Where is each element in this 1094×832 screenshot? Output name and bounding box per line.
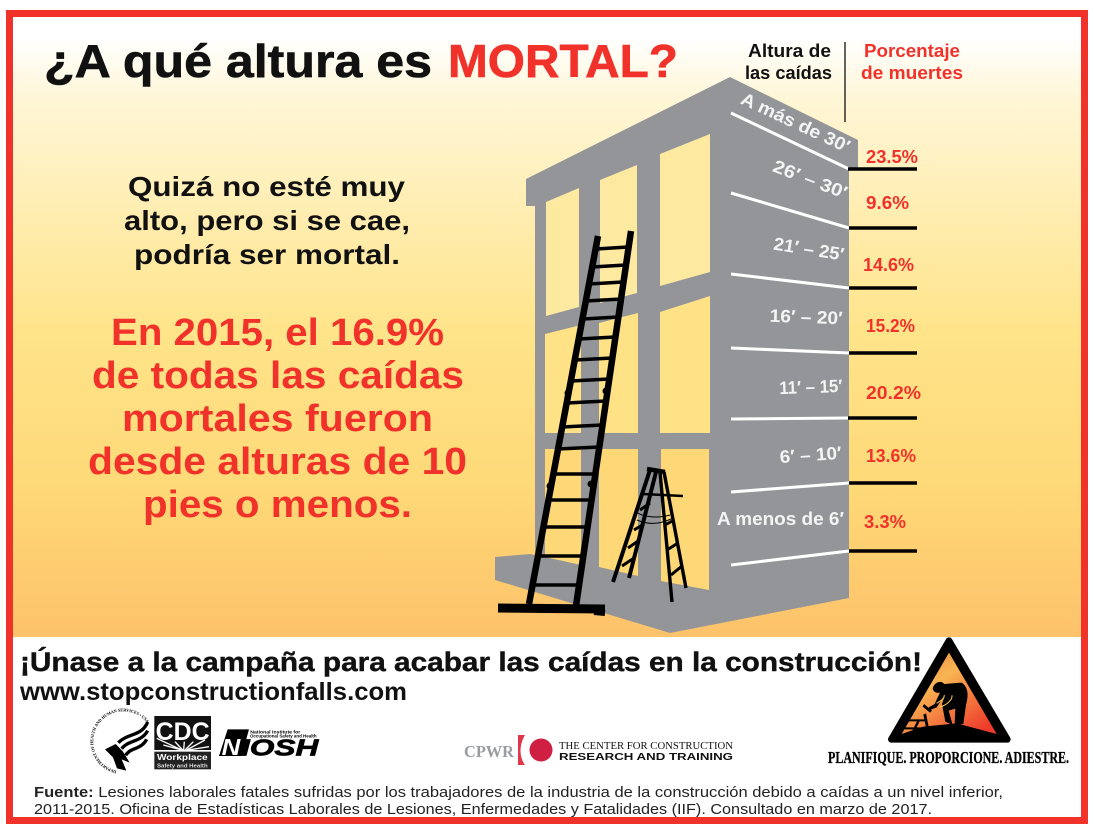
logo: NIOSH: N — [222, 734, 241, 760]
intro text: podría ser mortal. — [134, 239, 400, 270]
worker silhouette — [902, 682, 997, 734]
height labels — [717, 89, 853, 529]
percentages: 20.2% — [866, 383, 921, 403]
icon: step ladder — [613, 469, 686, 602]
building illustration — [495, 77, 858, 633]
intro text: alto, pero si se cae, — [124, 205, 410, 236]
column headers: Altura de — [748, 41, 831, 61]
icon: extension ladder — [498, 231, 631, 613]
percentages: 23.5% — [866, 147, 918, 167]
intro text: Quizá no esté muy — [128, 171, 405, 202]
title: ¿A qué altura es — [44, 35, 432, 87]
title — [44, 35, 678, 87]
key statistic text — [88, 312, 467, 526]
background panel — [13, 16, 1081, 637]
percentages: 14.6% — [863, 255, 914, 275]
intro text — [124, 171, 410, 270]
height labels: A más de 30′ — [738, 89, 853, 157]
height labels: 21′ – 25′ — [772, 234, 846, 265]
logo: CDC Workplace Safety and Health: Workplace — [157, 753, 208, 762]
logo: CPWR: THE CENTER FOR CONSTRUCTION — [559, 741, 733, 752]
source note: 2011-2015. Oficina de Estadísticas Laborales de Lesiones, Enfermedades y Fatalidades (IIF). Consultado en marzo de 2017. — [34, 801, 932, 818]
logo: CPWR: RESEARCH AND TRAINING — [559, 751, 733, 763]
column headers: Porcentaje — [864, 41, 960, 61]
percentages: 15.2% — [866, 316, 915, 336]
column headers — [745, 41, 963, 122]
percentages: 13.6% — [866, 446, 916, 466]
title: MORTAL? — [448, 35, 678, 87]
height labels: 26′ – 30′ — [770, 156, 850, 203]
key statistic text: En 2015, el 16.9% — [111, 312, 444, 354]
percentages: 9.6% — [866, 193, 909, 213]
percentages: 3.3% — [864, 512, 906, 532]
campaign website: www.stopconstructionfalls.com — [19, 678, 407, 706]
logo: NIOSH: Occupational Safety and Health — [250, 734, 317, 739]
key statistic text: desde alturas de 10 — [88, 441, 467, 483]
height labels: 11′ – 15′ — [779, 376, 843, 398]
source note: Fuente: Lesiones laborales fatales sufridas por los trabajadores de la industria de la construcción debido a caídas a un nivel inferior, — [34, 784, 1003, 801]
height labels: 6′ – 10′ — [779, 443, 842, 467]
source note — [34, 784, 1003, 818]
icon: warning triangle with worker — [891, 641, 1007, 739]
logo: CPWR — [464, 735, 733, 765]
campaign heading: ¡Únase a la campaña para acabar las caídas en la construcción! — [20, 646, 922, 677]
logo: CDC Workplace Safety and Health: Safety and Health — [157, 763, 208, 769]
logo: NIOSH — [219, 729, 319, 760]
logo: NIOSH: IOSH — [241, 734, 319, 760]
percentages — [863, 147, 921, 532]
black tick marks — [848, 169, 917, 551]
key statistic text: pies o menos. — [143, 484, 412, 526]
logo: CPWR: CPWR — [464, 742, 515, 761]
height labels: A menos de 6′ — [717, 509, 844, 529]
column headers: de muertes — [861, 63, 963, 83]
key statistic text: mortales fueron — [122, 398, 433, 440]
height labels: 16′ – 20′ — [769, 306, 843, 328]
logo: HHS: DEPARTMENT OF HEALTH AND HUMAN SERVICES • USA — [90, 708, 148, 774]
logo: NIOSH: National Institute for — [250, 729, 301, 734]
height dividers on building — [731, 113, 849, 565]
column headers: las caídas — [745, 63, 832, 83]
logo: CDC Workplace Safety and Health — [154, 716, 211, 769]
key statistic text: de todas las caídas — [92, 355, 464, 397]
logo: CDC Workplace Safety and Health: CDC — [156, 719, 210, 746]
